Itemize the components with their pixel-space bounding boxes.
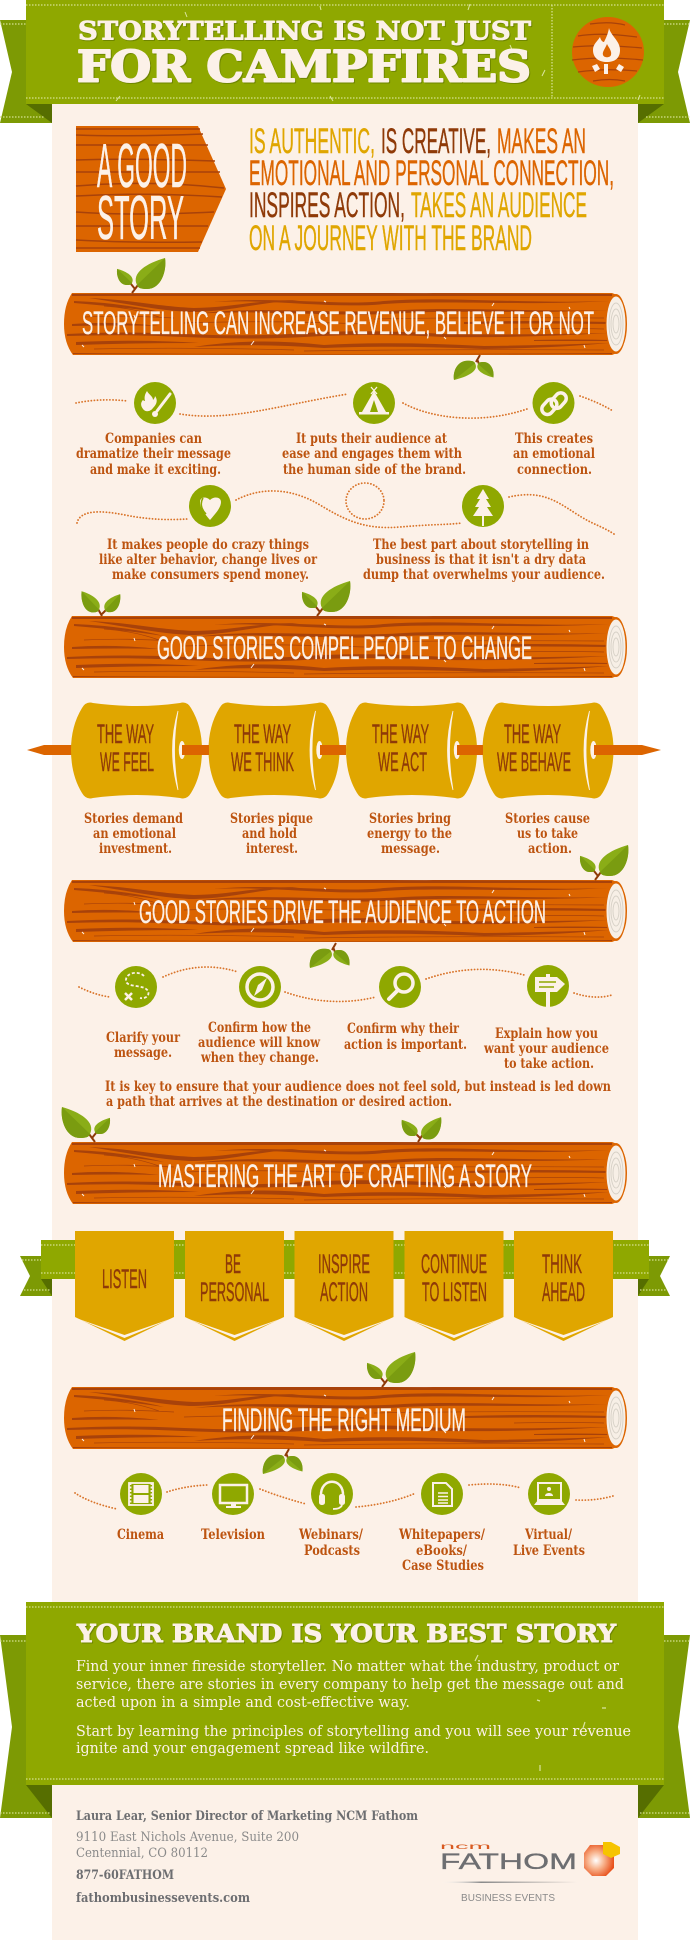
section heading log: mastering xyxy=(62,1107,627,1204)
footer heading: YOUR BRAND IS YOUR BEST STORY xyxy=(76,1619,617,1648)
caption: confirm how xyxy=(198,1020,320,1066)
pennant: think ahead xyxy=(514,1231,613,1341)
definition of a good story: INSPIRES ACTION, xyxy=(249,186,405,225)
footer body text: service, there are stories in every company to help get the message out and xyxy=(76,1675,624,1693)
contact details: Laura Lear, Senior Director of Marketing NCM Fathom xyxy=(76,1809,418,1824)
skewer left tip xyxy=(27,745,72,755)
caption: confirm how: Confirm how the xyxy=(208,1020,311,1036)
a good story arrow xyxy=(76,126,226,253)
caption: best part: The best part about storytelling in xyxy=(373,537,589,553)
footer body text: Start by learning the principles of storytelling and you will see your revenue xyxy=(76,1722,631,1740)
caption: take action: us to take xyxy=(517,826,578,842)
pennant: be personal: BE xyxy=(225,1249,241,1279)
green ribbon behind pennants xyxy=(20,1240,670,1296)
pennant: think ahead: AHEAD xyxy=(542,1277,585,1307)
dotted path: revenue xyxy=(76,394,614,534)
caption: pique interest: interest. xyxy=(246,841,298,857)
caption: confirm how: when they change. xyxy=(200,1050,319,1066)
panel: the way we behave: WE BEHAVE xyxy=(497,747,571,777)
caption: crazy things: like alter behavior, change lives or xyxy=(99,552,318,568)
icon: document xyxy=(421,1473,463,1515)
caption: pique interest xyxy=(230,811,313,857)
contact details: 877-60FATHOM xyxy=(76,1868,174,1883)
panel: the way we feel: WE FEEL xyxy=(100,747,154,777)
caption: human side xyxy=(282,431,466,478)
caption: explain: want your audience xyxy=(483,1041,609,1057)
label: virtual events: Virtual/ xyxy=(524,1527,572,1543)
caption: human side: It puts their audience at xyxy=(296,431,448,447)
caption: crazy things xyxy=(99,537,318,583)
label: whitepapers: Case Studies xyxy=(402,1558,484,1574)
definition of a good story: IS CREATIVE, xyxy=(381,122,491,161)
pennant: listen: LISTEN xyxy=(102,1264,147,1294)
caption: pique interest: Stories pique xyxy=(230,811,313,827)
label: television: Television xyxy=(201,1527,265,1543)
caption: take action xyxy=(505,811,590,857)
skewer segments emerging from log holes xyxy=(182,745,661,755)
dotted path: medium xyxy=(75,1484,613,1509)
pennant: continue to listen: TO LISTEN xyxy=(422,1277,487,1307)
icon: magnifying glass xyxy=(379,966,421,1008)
panel: the way we act: WE ACT xyxy=(378,747,427,777)
caption: emotional connection: an emotional xyxy=(513,446,595,462)
pennant: inspire action: INSPIRE xyxy=(318,1249,370,1279)
caption: emotional investment: investment. xyxy=(99,841,172,857)
skewer through four logs xyxy=(27,703,661,798)
caption: bring energy: message. xyxy=(381,841,440,857)
icon: signpost xyxy=(527,965,569,1007)
definition of a good story: IS AUTHENTIC, xyxy=(249,122,375,161)
caption: confirm why: Confirm why their xyxy=(347,1021,460,1037)
footer body text: acted upon in a simple and cost-effective way. xyxy=(76,1693,410,1711)
caption: dramatize xyxy=(76,431,231,478)
caption: human side: the human side of the brand. xyxy=(283,462,466,478)
caption: explain: to take action. xyxy=(504,1056,594,1072)
panel: the way we act: THE WAY xyxy=(372,719,429,749)
icon: television xyxy=(212,1473,254,1515)
caption: emotional investment: an emotional xyxy=(93,826,176,842)
contact details xyxy=(76,1809,418,1906)
icon: tent xyxy=(353,382,395,424)
section heading log: medium xyxy=(64,1352,627,1474)
a good story arrow: STORY xyxy=(97,184,184,253)
definition of a good story: MAKES AN xyxy=(497,122,586,161)
main title: FOR CAMPFIRES xyxy=(77,42,531,92)
caption: best part: dump that overwhelms your audience. xyxy=(363,567,605,583)
caption: clarify: message. xyxy=(114,1045,172,1061)
caption: bring energy: energy to the xyxy=(367,826,452,842)
panel: the way we think: THE WAY xyxy=(234,719,291,749)
icon: laptop xyxy=(528,1473,570,1515)
main title xyxy=(77,16,531,92)
caption: clarify: Clarify your xyxy=(106,1030,181,1046)
panel: the way we act xyxy=(346,703,477,798)
footer body text xyxy=(76,1657,631,1757)
footer body text: Find your inner fireside storyteller. No matter what the industry, product or xyxy=(76,1657,620,1675)
footer banner xyxy=(0,1602,690,1818)
panel: the way we think xyxy=(208,703,340,798)
caption: clarify xyxy=(106,1030,181,1061)
label: webinars and podcasts: Podcasts xyxy=(304,1543,360,1559)
caption: pique interest: and hold xyxy=(242,826,297,842)
main title: STORYTELLING IS NOT JUST xyxy=(78,16,531,46)
key takeaway text: a path that arrives at the destination or desired action. xyxy=(106,1094,452,1110)
dotted path: action xyxy=(79,967,612,1001)
caption: emotional connection xyxy=(513,431,595,478)
section heading log: medium: FINDING THE RIGHT MEDIUM xyxy=(222,1402,466,1438)
label: whitepapers: Whitepapers/ xyxy=(398,1527,485,1543)
logo: NCM Fathom: ncm xyxy=(440,1842,492,1851)
caption: dramatize: Companies can xyxy=(105,431,202,447)
pennant: continue to listen: CONTINUE xyxy=(421,1249,487,1279)
pennant: listen xyxy=(75,1231,174,1341)
icon: film strip xyxy=(120,1473,162,1515)
caption: best part xyxy=(363,537,605,583)
section heading log: drive action xyxy=(64,845,628,968)
pennant: be personal xyxy=(185,1231,284,1341)
icon: heart xyxy=(189,485,231,527)
caption: explain xyxy=(483,1026,609,1072)
definition of a good story xyxy=(249,122,614,258)
label: webinars and podcasts: Webinars/ xyxy=(298,1527,363,1543)
logo: NCM Fathom: FATHOM xyxy=(440,1849,577,1874)
panel: the way we feel xyxy=(71,703,202,798)
logo: NCM Fathom: BUSINESS EVENTS xyxy=(461,1893,555,1904)
label: cinema: Cinema xyxy=(117,1527,164,1543)
panel: the way we feel: THE WAY xyxy=(97,719,154,749)
section heading log: compel xyxy=(64,581,627,678)
label: whitepapers: eBooks/ xyxy=(416,1543,467,1559)
caption: explain: Explain how you xyxy=(495,1026,598,1042)
caption: confirm why: action is important. xyxy=(344,1037,467,1053)
icon: pine tree xyxy=(462,485,504,527)
caption: emotional investment: Stories demand xyxy=(84,811,183,827)
caption: take action: action. xyxy=(528,841,572,857)
caption: dramatize: and make it exciting. xyxy=(90,462,221,478)
caption: human side: ease and engages them with xyxy=(282,446,462,462)
label: virtual events: Live Events xyxy=(513,1543,585,1559)
a good story arrow: A GOOD xyxy=(97,132,187,201)
caption: emotional investment xyxy=(84,811,183,857)
panel: the way we behave xyxy=(482,703,614,798)
logo: NCM Fathom xyxy=(440,1842,620,1904)
caption: crazy things: make consumers spend money. xyxy=(112,567,309,583)
label: virtual events xyxy=(513,1527,585,1559)
section heading log: revenue xyxy=(64,258,627,380)
pennant: think ahead: THINK xyxy=(542,1249,582,1279)
caption: confirm why xyxy=(344,1021,467,1053)
caption: crazy things: It makes people do crazy things xyxy=(107,537,309,553)
label: whitepapers xyxy=(398,1527,485,1574)
contact details: fathombusinessevents.com xyxy=(76,1891,250,1906)
caption: best part: business is that it isn't a dry data xyxy=(376,552,586,568)
caption: dramatize: dramatize their message xyxy=(76,446,231,462)
icon: campfire xyxy=(572,17,644,87)
icon: headset xyxy=(311,1473,353,1515)
icon: treasure map xyxy=(115,966,157,1008)
pennant: be personal: PERSONAL xyxy=(200,1277,269,1307)
pennant: inspire action xyxy=(294,1231,394,1341)
caption: confirm how: audience will know xyxy=(198,1035,320,1051)
contact details: 9110 East Nichols Avenue, Suite 200 xyxy=(76,1830,299,1845)
header banner xyxy=(0,0,690,123)
icon: compass xyxy=(239,966,281,1008)
caption: emotional connection: This creates xyxy=(515,431,593,447)
panel: the way we behave: THE WAY xyxy=(504,719,561,749)
pennant: inspire action: ACTION xyxy=(320,1277,368,1307)
label: webinars and podcasts xyxy=(298,1527,363,1559)
caption: take action: Stories cause xyxy=(505,811,590,827)
icon: match and flame xyxy=(134,382,176,424)
caption: bring energy xyxy=(367,811,452,857)
panel: the way we think: WE THINK xyxy=(231,747,294,777)
caption: emotional connection: connection. xyxy=(517,462,592,478)
key takeaway text xyxy=(105,1079,611,1110)
icon: chain links xyxy=(532,382,574,424)
contact details: Centennial, CO 80112 xyxy=(76,1846,208,1861)
pennant: continue to listen xyxy=(404,1231,504,1341)
footer body text: ignite and your engagement spread like wildfire. xyxy=(76,1739,429,1757)
caption: bring energy: Stories bring xyxy=(369,811,451,827)
